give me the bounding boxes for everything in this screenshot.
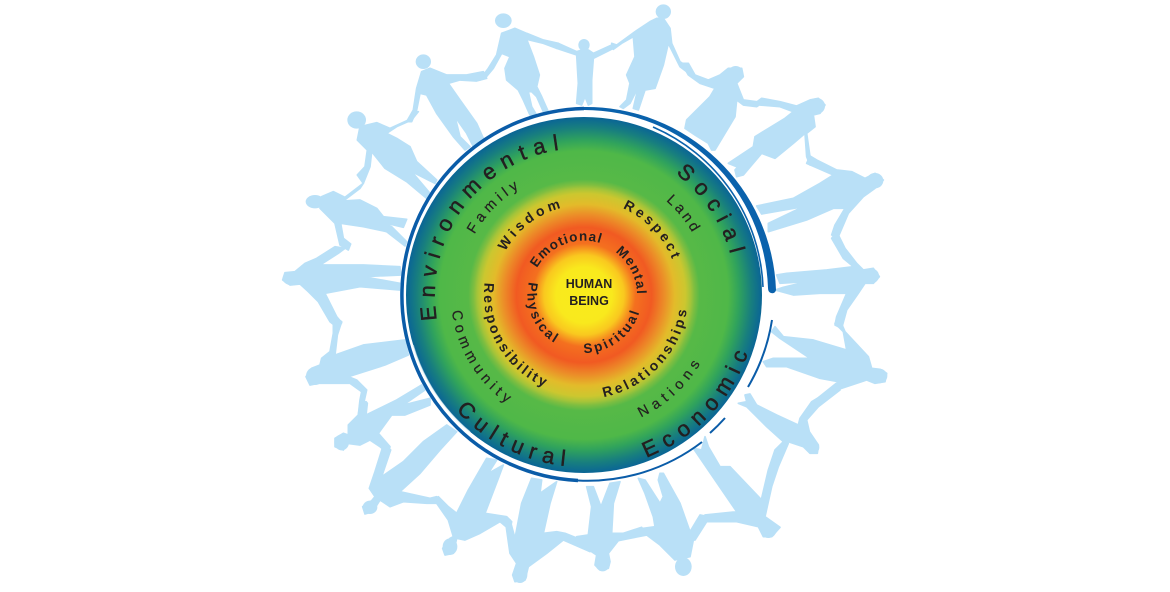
label: Physical: Physical <box>525 282 559 342</box>
people: upper left group <box>283 13 613 328</box>
label: Relationships: Relationships <box>602 310 686 397</box>
figure 14 <box>363 425 457 514</box>
people: upper right group <box>612 4 883 328</box>
figure 10 <box>638 473 708 576</box>
label: Mental: Mental <box>616 246 647 293</box>
label: Responsibility: Responsibility <box>484 284 548 388</box>
label: Wisdom: Wisdom <box>497 202 560 250</box>
figure 21 <box>480 13 558 115</box>
ring thin left and bottom stroke <box>402 108 584 480</box>
label: Cultural: Cultural <box>459 402 566 466</box>
gradient disc <box>406 117 762 473</box>
people: lower right group <box>577 320 887 576</box>
figure 17 <box>283 247 401 328</box>
label: Environmental: Environmental <box>420 134 558 320</box>
figure 7 <box>763 320 887 402</box>
ring of people holding hands <box>283 4 887 583</box>
label: Community: Community <box>452 310 512 403</box>
figure 9 <box>690 437 788 540</box>
figure 1: child at top <box>557 39 613 105</box>
label: Land: Land <box>666 194 701 232</box>
figure 11 <box>577 482 647 571</box>
people: lower left group <box>306 318 590 583</box>
label: Nations: Nations <box>637 361 700 417</box>
label: Social: Social <box>678 164 746 253</box>
figure 20 <box>407 54 487 150</box>
centre label: Human Being: HUMAN <box>566 277 612 291</box>
ring broken arc lower right 1 <box>748 320 772 387</box>
ring inner thin line at right <box>653 127 763 287</box>
figure 2 <box>612 4 687 110</box>
figure 12 <box>505 478 590 583</box>
label: Family: Family <box>466 182 517 234</box>
figure 15 <box>334 385 430 453</box>
figure 13 <box>437 458 512 555</box>
centre label: Human Being: BEING <box>569 294 609 308</box>
ring thick upper right brush stroke <box>584 107 776 293</box>
ring broken arc lower right 3 <box>578 442 702 481</box>
label: Economic: Economic <box>641 350 747 458</box>
figure 16 <box>306 318 408 415</box>
figure 5 <box>757 156 883 237</box>
label: Respect: Respect <box>624 200 680 259</box>
figure 3 <box>682 63 762 150</box>
figure 6 <box>775 232 879 328</box>
figure 4 <box>728 98 825 177</box>
ring broken arc lower right 2 <box>710 418 725 433</box>
figure 19 <box>347 111 437 198</box>
white backing behind disc <box>400 111 768 479</box>
label: Emotional: Emotional <box>530 232 602 268</box>
label: Spiritual: Spiritual <box>584 310 639 354</box>
blue brush ring <box>402 107 776 481</box>
pale highlight on disc edge <box>413 345 470 432</box>
figure 8 <box>738 387 840 498</box>
figure 18 <box>306 183 407 250</box>
centre label: Human Being <box>566 277 612 308</box>
